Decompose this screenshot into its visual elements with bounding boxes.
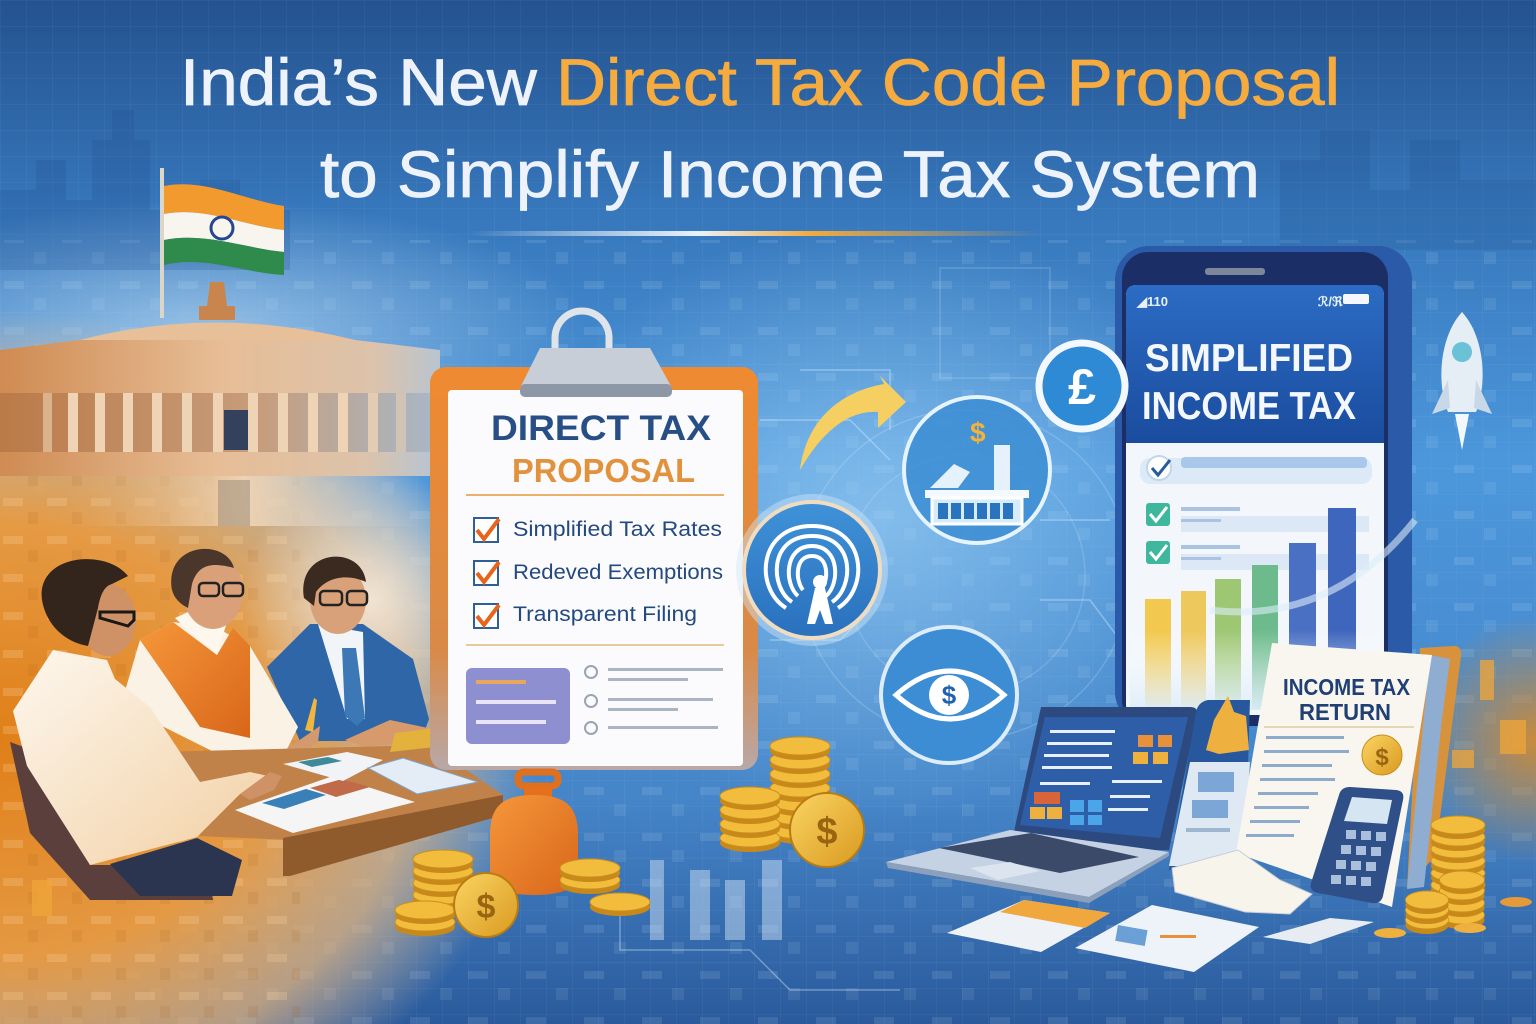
icon: eye with dollar circle: $ <box>942 680 957 710</box>
phone heading: SIMPLIFIED <box>1145 337 1353 380</box>
icon: clip <box>520 311 672 397</box>
title underline <box>470 231 1040 236</box>
clipboard heading: DIRECT TAX <box>491 409 712 448</box>
person: blue suit <box>267 557 429 747</box>
checklist: Transparent Filing <box>513 603 697 626</box>
icon: rocket <box>1432 312 1492 450</box>
phone checklist <box>1140 456 1372 570</box>
panel: income tax return book <box>1236 643 1461 907</box>
phone swoosh <box>1210 520 1415 612</box>
dollar coin: $ <box>477 888 496 926</box>
title line 1: India’s New Direct Tax Code Proposal <box>180 45 1340 119</box>
table with charts <box>157 727 503 876</box>
icon: thumbs up <box>1206 696 1249 754</box>
dollar coin <box>790 793 864 867</box>
icon: swoosh arrow <box>800 376 906 470</box>
icon: government building circle: $ <box>970 417 986 448</box>
phone status bar: ◢110 <box>1136 294 1168 309</box>
phone header <box>1126 285 1384 443</box>
summary card <box>466 666 723 744</box>
clipboard paper <box>448 390 743 766</box>
clipboard subheading: PROPOSAL <box>512 452 695 489</box>
checklist <box>474 518 723 628</box>
phone battery <box>1343 294 1369 304</box>
phone bar chart <box>1130 508 1380 710</box>
icon: fingerprint circle <box>736 494 888 646</box>
coin stack centre <box>720 737 864 867</box>
tablet with thumbs up <box>1169 696 1250 870</box>
orange bottle <box>490 772 578 895</box>
panel: clipboard <box>430 311 758 770</box>
icon: calculator <box>1311 787 1403 903</box>
panel: phone <box>1115 246 1415 726</box>
coin stack right <box>1374 816 1532 938</box>
dollar coin: $ <box>816 811 838 853</box>
icon: government building circle <box>904 397 1050 543</box>
clipboard board <box>430 367 758 770</box>
return heading: INCOME TAX <box>1283 674 1411 700</box>
icon: eye with dollar circle <box>881 627 1017 763</box>
panel: phone: ℛ/ℜ <box>1318 294 1343 309</box>
parliament building <box>0 282 440 526</box>
coin stack left <box>395 850 650 937</box>
icon: Indian flag <box>160 168 284 318</box>
dollar coin <box>454 873 518 937</box>
icon: currency circle <box>1039 343 1125 429</box>
laptop <box>886 707 1197 903</box>
person: orange vest <box>125 549 320 767</box>
checklist: Redeved Exemptions <box>513 561 723 584</box>
paper pile <box>1172 850 1312 914</box>
return subheading: RETURN <box>1299 699 1391 725</box>
checklist: Simplified Tax Rates <box>513 518 722 541</box>
phone subheading: INCOME TAX <box>1142 385 1356 428</box>
documents on floor <box>947 900 1374 972</box>
panel: income tax return book: $ <box>1375 744 1389 771</box>
people at table <box>10 549 503 900</box>
title line 2: to Simplify Income Tax System <box>320 137 1260 211</box>
person: white shirt, foreground <box>10 559 282 900</box>
phone camera <box>1205 268 1265 275</box>
icon: currency circle: £ <box>1068 359 1096 415</box>
title <box>180 45 1340 236</box>
